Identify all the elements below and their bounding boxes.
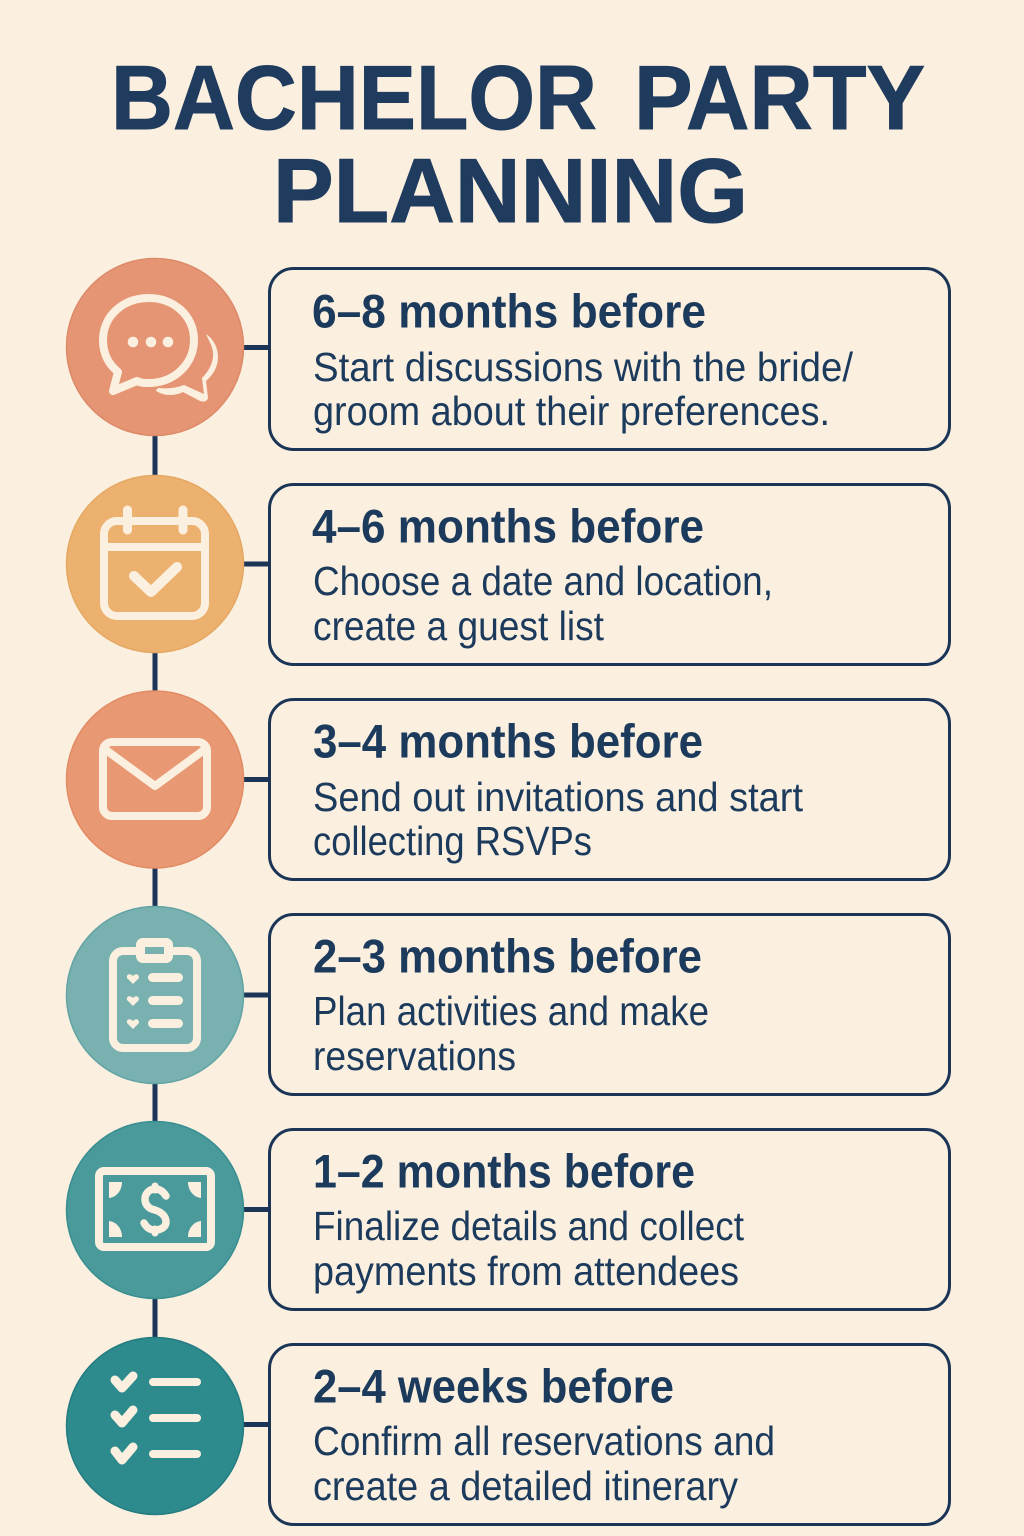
card: 2-3 months: 2–3 months before: [313, 930, 702, 982]
card: 1-2 months: Finalize details and collect: [313, 1203, 745, 1249]
card: 2-4 weeks: 2–4 weeks before: [313, 1360, 674, 1412]
icon: check list: [66, 1338, 244, 1514]
step 6: 2-4 weeks before: [66, 1338, 950, 1524]
card: 6-8 months: 6–8 months before: [312, 284, 706, 338]
card: 4-6 months: 4–6 months before: [312, 500, 704, 552]
step 3: 3-4 months before: [66, 691, 950, 880]
card: 4-6 months: create a guest list: [313, 603, 605, 649]
card: 4-6 months: Choose a date and location,: [313, 558, 773, 604]
card: 2-3 months: [270, 914, 950, 1094]
card: 4-6 months: [270, 484, 950, 664]
icon: clipboard checklist: [66, 906, 244, 1084]
card: 2-3 months: Plan activities and make: [313, 988, 709, 1034]
card: 6-8 months: Start discussions with the bride/: [313, 344, 854, 390]
card: 2-4 weeks: [270, 1344, 950, 1524]
card: 1-2 months: payments from attendees: [313, 1248, 739, 1294]
icon: dollar bill: [66, 1122, 244, 1298]
title: PLANNING: [273, 141, 748, 242]
step 5: 1-2 months before: [66, 1122, 950, 1310]
step 2: 4-6 months before: [66, 476, 950, 664]
card: 2-4 weeks: Confirm all reservations and: [313, 1418, 775, 1464]
step 1: 6-8 months before: [66, 258, 950, 450]
card: 2-3 months: reservations: [313, 1033, 516, 1079]
card: 6-8 months: groom about their preferences.: [313, 388, 830, 434]
icon: chat bubbles: [66, 258, 244, 436]
icon: calendar with check: [66, 476, 244, 652]
card: 3-4 months: [270, 700, 950, 880]
icon: envelope: [66, 691, 244, 868]
card: 3-4 months: 3–4 months before: [313, 714, 703, 768]
title: [111, 48, 925, 242]
card: 1-2 months: [270, 1130, 950, 1310]
card: 6-8 months: [270, 268, 950, 450]
title: PARTY: [634, 48, 925, 149]
card: 1-2 months: 1–2 months before: [313, 1144, 695, 1198]
card: 3-4 months: Send out invitations and start: [313, 774, 804, 820]
title: BACHELOR: [111, 48, 597, 149]
timeline connectors: [155, 348, 270, 1424]
card: 2-4 weeks: create a detailed itinerary: [313, 1463, 738, 1509]
step 4: 2-3 months before: [66, 906, 950, 1094]
card: 3-4 months: collecting RSVPs: [313, 818, 592, 864]
